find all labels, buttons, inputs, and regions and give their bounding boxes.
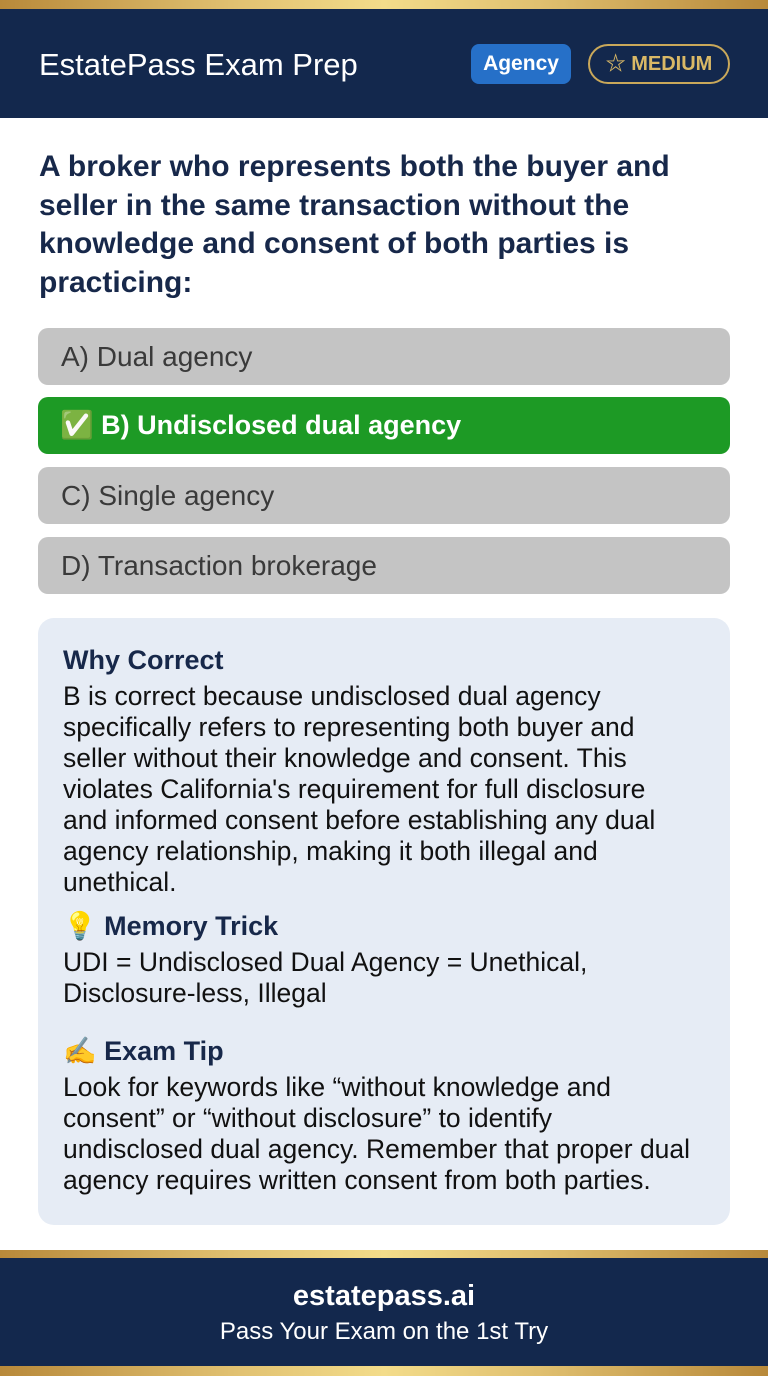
heading: memory trick: 💡 Memory Trick — [63, 911, 278, 941]
question — [39, 150, 670, 298]
option D: D) Transaction brokerage — [61, 550, 377, 581]
option A: A) Dual agency — [61, 341, 252, 372]
text: why correct: specifically refers to representing both buyer and — [63, 712, 635, 742]
badge: agency — [471, 44, 571, 84]
text: why correct: and informed consent before establishing any dual — [63, 805, 655, 835]
text: memory trick — [63, 947, 587, 1008]
option C: C) Single agency — [61, 480, 274, 511]
footer tagline: Pass Your Exam on the 1st Try — [220, 1318, 548, 1345]
heading: exam tip: ✍️ Exam Tip — [63, 1036, 224, 1066]
text: exam tip: undisclosed dual agency. Remember that proper dual — [63, 1134, 690, 1164]
text: memory trick: Disclosure-less, Illegal — [63, 978, 327, 1008]
question: practicing: — [39, 266, 192, 298]
text: why correct — [63, 681, 655, 897]
text: why correct: agency relationship, making it both illegal and — [63, 836, 598, 866]
text: exam tip: agency requires written consent from both parties. — [63, 1165, 651, 1195]
text: why correct: unethical. — [63, 867, 176, 897]
text: exam tip — [63, 1072, 690, 1195]
option B correct: ✅ B) Undisclosed dual agency — [60, 410, 461, 440]
option D — [38, 537, 730, 594]
text: why correct: B is correct because undisclosed dual agency — [63, 681, 601, 711]
badge: agency: Agency — [483, 52, 559, 75]
text: memory trick: UDI = Undisclosed Dual Agency = Unethical, — [63, 947, 587, 977]
badge: medium — [588, 44, 730, 84]
option A — [38, 328, 730, 385]
footer site name: estatepass.ai — [293, 1280, 475, 1312]
heading: why correct: Why Correct — [63, 645, 224, 675]
text: why correct: seller without their knowledge and consent. This — [63, 743, 627, 773]
question: A broker who represents both the buyer and — [39, 150, 670, 183]
option C — [38, 467, 730, 524]
text: exam tip: consent” or “without disclosure” to identify — [63, 1103, 552, 1133]
text: why correct: violates California's requirement for full disclosure — [63, 774, 645, 804]
option B correct — [38, 397, 730, 454]
header bar — [0, 0, 768, 118]
question: seller in the same transaction without the — [39, 188, 629, 222]
header title: EstatePass Exam Prep — [39, 47, 358, 82]
question: knowledge and consent of both parties is — [39, 227, 629, 260]
badge: medium: ☆ MEDIUM — [606, 53, 712, 75]
text: exam tip: Look for keywords like “without knowledge and — [63, 1072, 611, 1102]
footer — [0, 1250, 768, 1376]
panel: explanation — [38, 618, 730, 1225]
